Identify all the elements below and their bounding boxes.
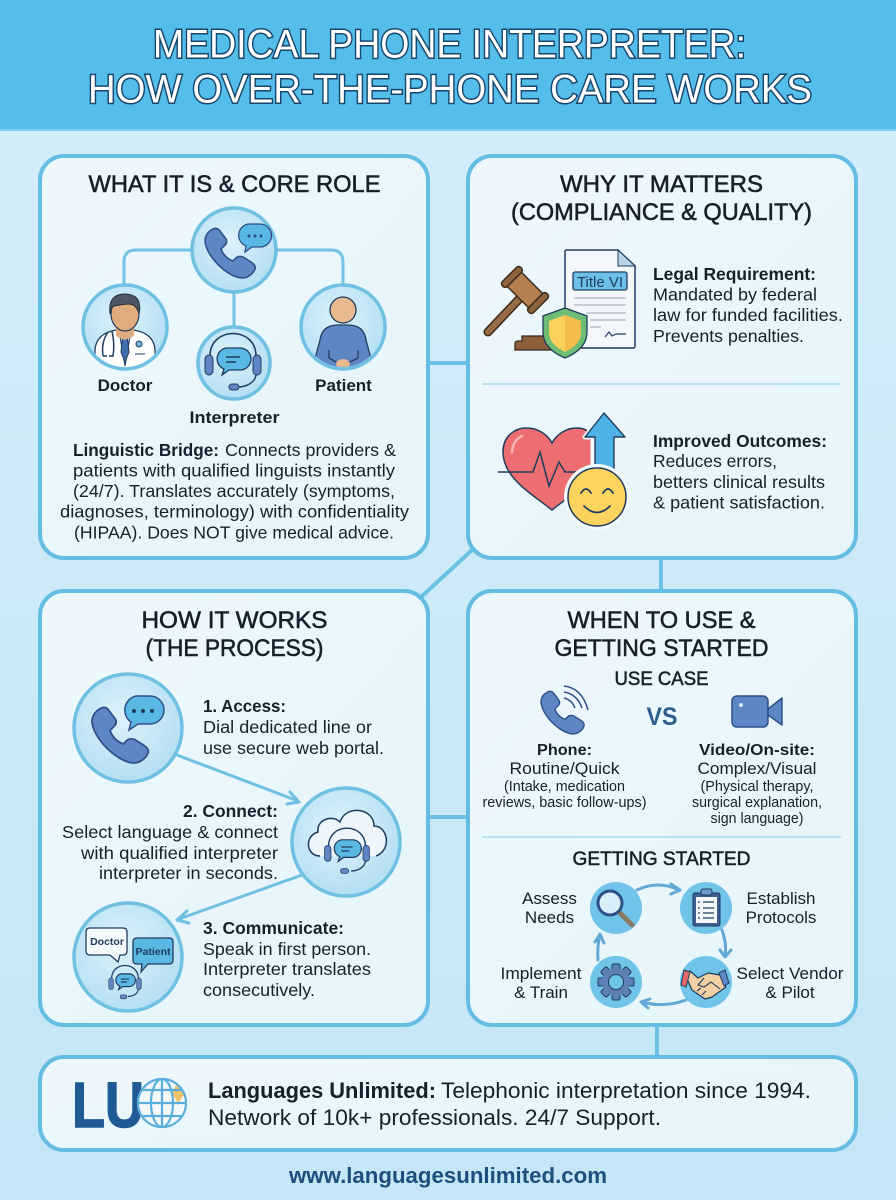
text: video use case: Complex/Visual [698, 759, 816, 778]
icon: step 1 phone [74, 674, 182, 782]
heading: what it is: WHAT IT IS & CORE ROLE [88, 171, 380, 198]
icon: gavel, document and shield [488, 250, 635, 358]
text: video use case: (Physical therapy, [700, 779, 814, 795]
icon: heart, arrow and smiley [498, 413, 630, 530]
website url: www.languagesunlimited.com [288, 1163, 607, 1188]
text: video use case: sign language) [710, 811, 804, 827]
subheading: getting started: GETTING STARTED [572, 849, 750, 870]
logo: LU with globe: LU [72, 1069, 144, 1141]
panel: why it matters [468, 156, 856, 558]
text: step 1 access: 1. Access: [203, 696, 286, 716]
icon: phone with speech bubble [192, 208, 276, 292]
text: video use case [692, 742, 822, 827]
text: linguistic bridge description: diagnoses, terminology) with confidentiality [60, 502, 409, 522]
label: assess needs [522, 889, 577, 927]
text: step 3 communicate [203, 918, 371, 1000]
text: phone use case: Phone: [537, 742, 592, 759]
label: establish protocols [746, 889, 816, 927]
icon: doctor [83, 285, 167, 372]
icon: step 3 speech bubbles: Patient [135, 946, 171, 958]
label: implement and train: Implement [500, 964, 582, 983]
text: company description: Telephonic interpretation since 1994. [441, 1078, 811, 1103]
arrows: getting started cycle [595, 884, 731, 1008]
text: step 2 connect: interpreter in seconds. [99, 863, 278, 883]
icon: gear [590, 956, 642, 1008]
heading: why it matters [511, 171, 812, 226]
label: select vendor and pilot: Select Vendor [736, 964, 844, 983]
text: company description: Network of 10k+ professionals. 24/7 Support. [208, 1105, 661, 1130]
text: step 3 communicate: consecutively. [203, 980, 315, 1000]
subheading: use case: USE CASE [614, 669, 708, 690]
icon: magnifier [590, 882, 642, 934]
heading: when to use: GETTING STARTED [554, 635, 768, 662]
text: phone use case: reviews, basic follow-ups) [482, 795, 646, 811]
text: linguistic bridge description [60, 440, 409, 542]
text: step 2 connect: Select language & connect [62, 822, 278, 842]
text: improved outcomes: Improved Outcomes: [653, 431, 827, 451]
icon: interpreter headset [198, 327, 270, 399]
header banner [0, 0, 896, 131]
label: select vendor and pilot: & Pilot [765, 983, 815, 1002]
panel: languages unlimited footer [40, 1057, 856, 1150]
heading: how it works [142, 607, 328, 662]
text: phone use case: (Intake, medication [504, 779, 625, 795]
text: step 2 connect [62, 801, 278, 883]
text: improved outcomes: betters clinical results [653, 472, 825, 492]
text: step 2 connect: 2. Connect: [183, 801, 278, 821]
text: improved outcomes [653, 431, 827, 512]
panel: how it works [40, 591, 428, 1025]
panel: when to use and getting started [468, 591, 856, 1025]
icon: phone with signal [541, 686, 588, 734]
label: assess needs: Needs [525, 908, 574, 927]
text: linguistic bridge description: Connects providers & [225, 440, 396, 460]
title: HOW OVER-THE-PHONE CARE WORKS [88, 68, 812, 112]
text: legal requirement: law for funded facilities. [653, 305, 843, 325]
icon: gavel, document and shield: Title VI [577, 274, 623, 291]
text: company description [208, 1078, 811, 1130]
icon: step 3 speech bubbles [74, 903, 182, 1011]
text: video use case: Video/On-site: [699, 742, 815, 759]
text: legal requirement: Mandated by federal [653, 284, 817, 304]
text: legal requirement: Legal Requirement: [653, 264, 816, 284]
label: patient: Patient [315, 376, 372, 395]
icon: video camera [732, 696, 782, 727]
panel: what it is and core role [40, 156, 428, 558]
heading: how it works: HOW IT WORKS [142, 607, 328, 634]
arrow: access to connect [177, 755, 299, 804]
label: establish protocols: Protocols [746, 908, 816, 927]
heading: why it matters: (COMPLIANCE & QUALITY) [511, 199, 812, 226]
label: establish protocols: Establish [747, 889, 815, 908]
text: step 3 communicate: 3. Communicate: [203, 918, 344, 938]
text: step 1 access: use secure web portal. [203, 738, 384, 758]
text: legal requirement: Prevents penalties. [653, 326, 804, 346]
text: step 1 access [203, 696, 384, 758]
text: step 3 communicate: Interpreter translates [203, 959, 371, 979]
title: MEDICAL PHONE INTERPRETER: [153, 22, 746, 66]
icon: handshake [680, 956, 732, 1008]
text: linguistic bridge description: (24/7). Translates accurately (symptoms, [73, 481, 395, 501]
title [88, 22, 812, 112]
heading: why it matters: WHY IT MATTERS [560, 171, 763, 198]
text: linguistic bridge description: patients with qualified linguists instantly [73, 460, 395, 480]
text: step 2 connect: with qualified interpreter [80, 843, 278, 863]
text: step 3 communicate: Speak in first person. [203, 939, 371, 959]
text: improved outcomes: & patient satisfaction. [653, 492, 825, 512]
label: doctor: Doctor [98, 376, 153, 395]
icon: patient [301, 285, 385, 372]
label: vs: VS [646, 703, 678, 731]
arrow: connect to communicate [177, 875, 302, 923]
label: implement and train: & Train [514, 983, 568, 1002]
heading: when to use: WHEN TO USE & [568, 607, 756, 634]
text: legal requirement [653, 264, 843, 346]
heading: when to use [554, 607, 768, 662]
icon: step 3 speech bubbles: Doctor [90, 936, 124, 948]
label: interpreter: Interpreter [190, 408, 280, 427]
text: phone use case: Routine/Quick [510, 759, 620, 778]
label: select vendor and pilot [736, 964, 844, 1002]
text: video use case: surgical explanation, [692, 795, 822, 811]
icon: clipboard [680, 882, 732, 934]
text: linguistic bridge description: Linguistic Bridge: [73, 440, 219, 460]
text: company description: Languages Unlimited: [208, 1078, 436, 1103]
heading: how it works: (THE PROCESS) [146, 635, 324, 662]
icon: step 2 cloud with headset [292, 788, 400, 896]
label: assess needs: Assess [522, 889, 577, 908]
text: phone use case [482, 742, 646, 811]
text: improved outcomes: Reduces errors, [653, 451, 777, 471]
label: implement and train [500, 964, 582, 1002]
text: step 1 access: Dial dedicated line or [203, 717, 372, 737]
text: linguistic bridge description: (HIPAA). Does NOT give medical advice. [74, 522, 394, 542]
